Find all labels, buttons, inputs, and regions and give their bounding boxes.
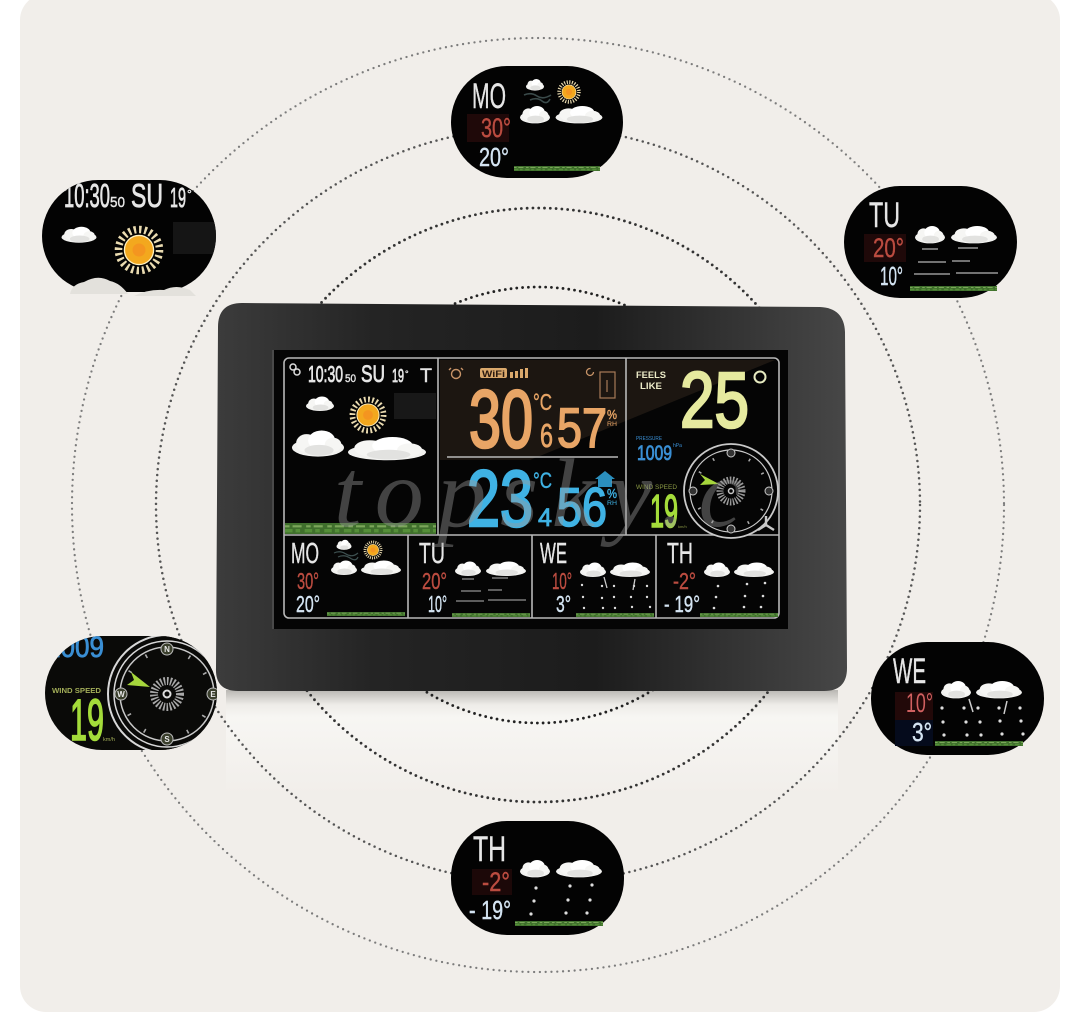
compass <box>684 444 778 538</box>
dark patch <box>394 393 436 419</box>
outdoor humidity: 57 <box>557 396 607 459</box>
callout bubble: Monday forecast: 20° <box>479 142 509 172</box>
icon: alarm clock <box>449 368 463 378</box>
icon: sun <box>118 229 160 271</box>
feels like label: FEELS <box>636 370 666 380</box>
panel: outdoor temperature and humidity: 6 <box>540 417 553 454</box>
signal bars <box>510 368 528 378</box>
icon: sun <box>352 399 384 431</box>
forecast: Monday: MO <box>291 538 319 570</box>
pressure: 1009 <box>637 442 672 465</box>
callout bubble: Tuesday forecast: TU <box>869 196 900 235</box>
panel: outdoor temperature and humidity: % <box>607 407 617 422</box>
callout bubble: Wednesday forecast <box>871 642 1044 755</box>
forecast: Tuesday: 20° <box>422 568 447 594</box>
forecast: Tuesday: 10° <box>428 591 447 617</box>
callout bubble: Wednesday forecast: WE <box>893 652 926 691</box>
callout bubble: current conditions: 50 <box>110 194 125 211</box>
callout bubble: Tuesday forecast: 20° <box>873 233 904 263</box>
forecast: Monday: 30° <box>297 568 319 594</box>
WiFi badge <box>480 368 507 379</box>
forecast: Thursday: TH <box>667 538 693 570</box>
time and day row: 19 <box>392 366 404 386</box>
icon: small cloud <box>62 227 96 243</box>
callout bubble: Thursday forecast <box>451 821 624 935</box>
wind speed: 19 <box>650 485 678 537</box>
time and day: 10:30 <box>64 177 110 214</box>
compass <box>108 635 226 753</box>
time and day row: 10:30 <box>308 361 343 387</box>
pressure reading: 1009 <box>46 631 104 664</box>
feels like label: LIKE <box>640 381 662 391</box>
panel: indoor temperature and humidity: % <box>607 486 617 501</box>
forecast: Thursday: -2° <box>673 568 696 594</box>
callout bubble: current conditions: 19 <box>170 182 186 213</box>
forecast: Wednesday <box>540 538 654 617</box>
panel: outdoor temperature and humidity: °C <box>533 389 552 415</box>
wind speed <box>636 485 687 537</box>
panel: outdoor temperature and humidity <box>449 368 617 465</box>
panel: feels like, pressure and wind <box>636 355 778 538</box>
WiFi badge: WiFi <box>482 369 505 379</box>
screen <box>272 350 788 629</box>
callout bubble: Thursday forecast: -2° <box>482 867 510 897</box>
feels like temperature: 25 <box>680 355 749 444</box>
panel: outdoor temperature and humidity: RH <box>607 422 617 428</box>
forecast: Thursday: - 19° <box>664 591 700 617</box>
callout bubble: Wednesday forecast: 3° <box>912 717 932 747</box>
feels like label <box>636 370 666 391</box>
forecast: Thursday <box>664 538 778 617</box>
reflection under the device <box>226 690 838 795</box>
wind speed label: WIND SPEED <box>52 686 102 695</box>
panel: indoor temperature and humidity: °C <box>533 468 552 493</box>
lower cloud tops <box>70 278 196 296</box>
watermark: topsky.c <box>334 440 742 548</box>
callout bubble: current conditions <box>42 177 216 296</box>
icon: left cloud <box>292 430 344 457</box>
callout bubble: Tuesday forecast: 10° <box>880 261 903 291</box>
callout bubble: Monday forecast: MO <box>472 77 506 116</box>
wind speed value: 19 <box>70 688 104 753</box>
compass: E <box>210 690 216 699</box>
time and day row <box>308 361 432 388</box>
dark patch <box>173 222 216 254</box>
icon: right cloud <box>348 437 426 460</box>
panel: indoor temperature and humidity: RH <box>607 501 617 507</box>
callout bubble: wind and compass: km/h <box>103 737 115 743</box>
forecast: Monday: 20° <box>296 591 320 617</box>
dotted concentric rings <box>72 38 1004 972</box>
weather station device <box>216 303 847 691</box>
time and day row: 50 <box>345 373 356 385</box>
refresh icon <box>586 368 594 376</box>
callout bubble: Wednesday forecast: 10° <box>906 688 933 718</box>
callout bubble: current conditions: ° <box>187 187 192 201</box>
callout bubble: Tuesday forecast <box>844 186 1017 298</box>
compass: N <box>164 645 170 654</box>
battery icon <box>600 372 615 398</box>
alarm icon <box>290 364 300 375</box>
time and day row: T <box>420 366 432 387</box>
wind speed: WIND SPEED <box>636 485 678 491</box>
wind speed: km/h <box>678 524 687 529</box>
outdoor temperature: 30 <box>469 374 533 465</box>
compass: W <box>117 690 125 699</box>
forecast: Tuesday <box>419 538 530 617</box>
time and day row: SU <box>361 361 385 388</box>
glare on the screen <box>440 360 775 460</box>
panel: indoor temperature and humidity <box>467 454 617 543</box>
icon: fan <box>758 516 774 530</box>
pressure: PRESSURE <box>636 436 663 442</box>
icon: small cloud <box>306 396 334 411</box>
panel: current outdoor conditions <box>285 361 436 534</box>
forecast: Wednesday: 3° <box>556 591 571 617</box>
forecast: Wednesday: WE <box>540 538 567 570</box>
forecast: Tuesday: TU <box>419 538 445 570</box>
panel frame lines <box>284 358 779 618</box>
forecast: Monday <box>291 538 405 617</box>
callout bubble: Monday forecast <box>451 66 623 178</box>
forecast: Wednesday: 10° <box>552 568 572 594</box>
icon: home <box>595 471 615 487</box>
pressure: hPa <box>673 443 682 449</box>
device body <box>216 303 847 691</box>
callout bubble: Monday forecast: 30° <box>481 113 511 143</box>
compass: S <box>164 735 170 744</box>
callout bubble: current conditions: SU <box>131 177 163 214</box>
grass strip <box>285 523 436 534</box>
callout bubble: Thursday forecast: TH <box>473 830 506 869</box>
time and day row: ° <box>405 369 409 379</box>
indoor humidity: 56 <box>557 476 607 538</box>
callout bubble: wind and compass <box>45 636 217 750</box>
indoor temperature: 23 <box>467 454 533 543</box>
panel: indoor temperature and humidity: 4 <box>538 504 552 532</box>
callout bubble: Thursday forecast: - 19° <box>469 895 511 925</box>
